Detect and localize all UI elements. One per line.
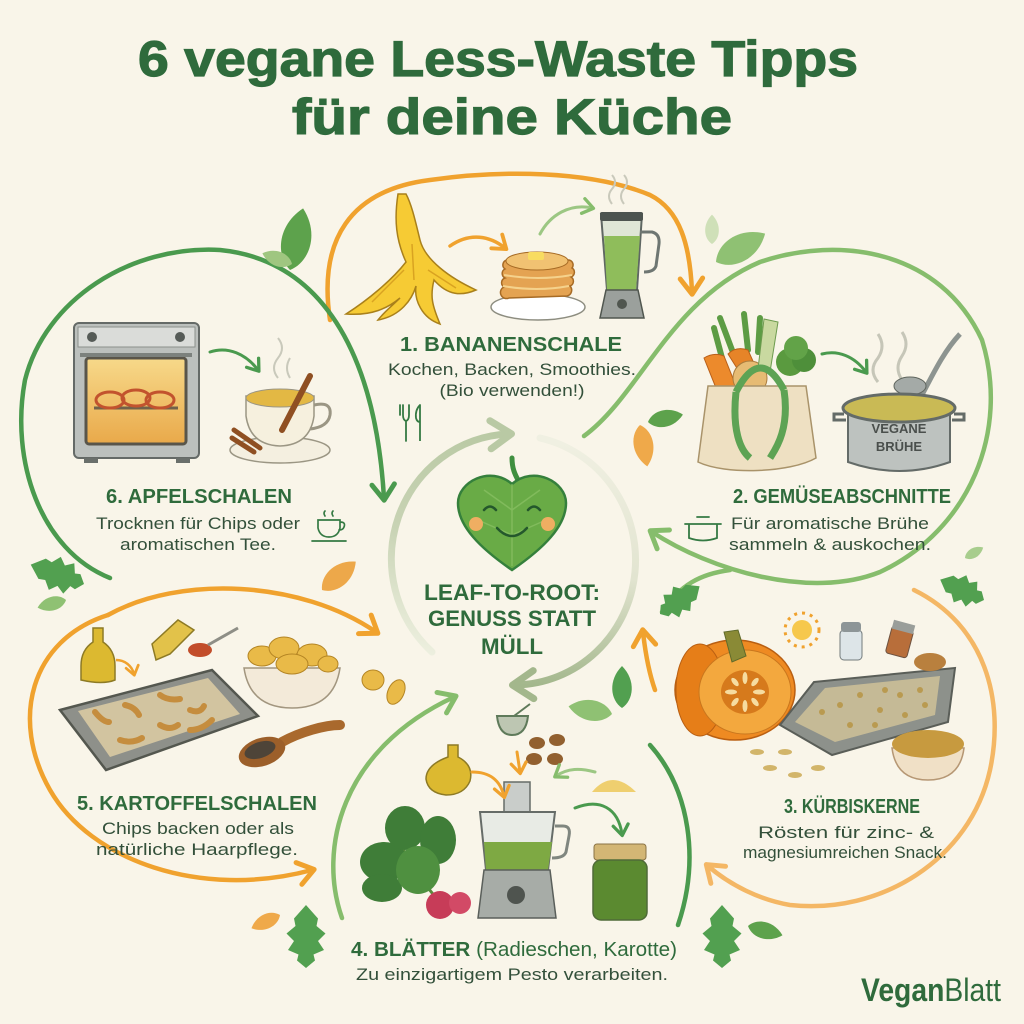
central slogan: MÜLL bbox=[481, 634, 543, 659]
icon: pesto jar bbox=[593, 844, 647, 920]
description bbox=[96, 514, 300, 554]
title: 6 vegane Less-Waste Tipps bbox=[138, 31, 858, 87]
description: Kochen, Backen, Smoothies. bbox=[388, 360, 636, 379]
heading: 6. APFELSCHALEN bbox=[106, 486, 292, 508]
icon: leaf left bbox=[25, 548, 90, 600]
description bbox=[729, 514, 931, 554]
icon: orange leaf tip 5 bbox=[315, 554, 362, 598]
icon: cutlery bbox=[400, 405, 420, 441]
icon: radish greens bbox=[360, 806, 471, 919]
icon: oak leaf branch bbox=[651, 574, 708, 626]
arrow: pancakes to blender bbox=[540, 207, 592, 234]
arrow: oil to tray bbox=[116, 660, 134, 674]
arrow: pumpkin to centre bbox=[643, 632, 655, 690]
icon: leaf centre bottom bbox=[612, 666, 632, 708]
decorative leaves bbox=[25, 205, 990, 968]
description: Für aromatische Brühe bbox=[731, 514, 929, 533]
icon: pouring bottle bbox=[152, 620, 194, 660]
arrow: oven to tea bbox=[210, 350, 258, 370]
panel: tip 3 kürbiskerne bbox=[675, 613, 964, 862]
icon: leaf top left bbox=[276, 205, 317, 273]
icon: leaf bottom right bbox=[702, 905, 742, 968]
icon: leaf right small bbox=[963, 543, 986, 562]
icon: yeast pile bbox=[592, 780, 636, 792]
heading: 5. KARTOFFELSCHALEN bbox=[77, 793, 317, 815]
description: Zu einzigartigem Pesto verarbeiten. bbox=[356, 965, 668, 984]
icon: pancakes bbox=[491, 252, 585, 320]
icon: vegetable bag bbox=[698, 314, 816, 471]
icon: chips bowl bbox=[244, 637, 340, 708]
icon: leaf top right small bbox=[705, 215, 719, 244]
description bbox=[96, 819, 298, 859]
description: Trocknen für Chips oder bbox=[96, 514, 300, 533]
icon: leaf centre bottom 2 bbox=[567, 696, 614, 724]
icon: banana peel bbox=[346, 194, 476, 324]
description bbox=[743, 823, 947, 862]
icon: loose chips bbox=[362, 670, 409, 707]
icon: mortar bbox=[497, 704, 530, 735]
description: magnesiumreichen Snack. bbox=[743, 843, 947, 862]
icon: salt shaker bbox=[840, 622, 862, 660]
heading: 2. GEMÜSEABSCHNITTE bbox=[733, 485, 951, 508]
description: natürliche Haarpflege. bbox=[96, 840, 298, 859]
arrow: tip 5 to tip 4 bbox=[30, 615, 312, 880]
icon: oil bottle bbox=[81, 628, 115, 682]
panel: tip 6 apfelschalen bbox=[74, 323, 346, 554]
arrow: tip 4 up right bbox=[650, 745, 689, 925]
icon: leaf arrow branch bbox=[646, 406, 685, 430]
arrow: banana to pancakes bbox=[450, 237, 505, 248]
icon: orange leaf bbox=[630, 423, 657, 468]
icon: food processor bbox=[478, 782, 569, 918]
panel: tip 1 bananenschale bbox=[346, 175, 659, 441]
icon: seed bowl bbox=[892, 730, 964, 780]
centre circular arrows bbox=[391, 434, 636, 685]
central slogan: LEAF-TO-ROOT: bbox=[424, 580, 600, 605]
arrow: tip 1 to tip 2 bbox=[328, 174, 692, 320]
heading: 4. BLÄTTER (Radieschen, Karotte) bbox=[351, 938, 677, 961]
icon: leaf left small bbox=[36, 593, 68, 614]
icon: oven bbox=[74, 323, 199, 463]
description: Rösten für zinc- & bbox=[758, 823, 935, 842]
icon: pot with ladle: VEGANE bbox=[872, 421, 927, 436]
icon: spice jar bbox=[885, 620, 915, 658]
arrow: tip 5 to centre bbox=[108, 589, 376, 632]
panel: tip 4 blätter bbox=[351, 704, 677, 984]
icon: pot with ladle: BRÜHE bbox=[876, 439, 922, 454]
icon: sun bbox=[785, 613, 819, 647]
central slogan bbox=[424, 580, 600, 659]
central heart leaf icon bbox=[458, 458, 566, 570]
description: sammeln & auskochen. bbox=[729, 535, 931, 554]
icon: leaf right bbox=[934, 566, 990, 614]
icon: small cup bbox=[312, 511, 346, 541]
icon: tea cup bbox=[230, 338, 330, 463]
flow arrows bbox=[21, 174, 995, 925]
arrow: bag to pot bbox=[822, 353, 866, 372]
icon: loose seeds bbox=[750, 749, 825, 778]
arrow: tip 2 to centre bbox=[584, 250, 991, 583]
icon: oil bottle bbox=[426, 745, 471, 795]
arrows: ingredients to processor bbox=[472, 752, 622, 834]
central slogan: GENUSS STATT bbox=[428, 606, 597, 631]
icon: nuts bbox=[526, 734, 565, 765]
panel: tip 2 gemüseabschnitte bbox=[685, 314, 964, 554]
icon: spice spoon bbox=[188, 628, 238, 657]
icon: leaf bottom left bbox=[286, 905, 326, 968]
arrow: tip 4 to centre bbox=[333, 697, 454, 918]
arrow: tip 3 to tip 4 bbox=[708, 590, 995, 906]
icon: small pot bbox=[685, 517, 721, 540]
icon: blender bbox=[600, 175, 659, 318]
icon: seed tray bbox=[780, 668, 955, 755]
logo: VeganBlatt bbox=[861, 972, 1001, 1008]
icon: leaf bottom right small bbox=[746, 918, 785, 943]
description: aromatischen Tee. bbox=[120, 535, 276, 554]
panel: tip 5 kartoffelschalen bbox=[60, 620, 409, 859]
icon: potato peel tray bbox=[60, 670, 258, 770]
icon: pot with ladle bbox=[834, 332, 964, 471]
title bbox=[138, 31, 858, 145]
heading: 3. KÜRBISKERNE bbox=[784, 795, 920, 818]
description: Chips backen oder als bbox=[102, 819, 294, 838]
icon: leaf top left small bbox=[260, 246, 295, 271]
arrow: tip 2 branch bbox=[662, 570, 730, 612]
title: für deine Küche bbox=[292, 89, 732, 145]
description: (Bio verwenden!) bbox=[440, 381, 584, 400]
icon: pumpkin bbox=[675, 630, 795, 740]
heading: 1. BANANENSCHALE bbox=[400, 334, 622, 356]
icon: hair brush bbox=[235, 725, 340, 773]
arrow: tip 6 to centre bbox=[21, 250, 384, 578]
description bbox=[388, 360, 636, 400]
icon: orange leaf bottom bbox=[248, 908, 283, 935]
icon: leaf top right bbox=[709, 222, 772, 273]
icon: spice pile bbox=[914, 653, 946, 671]
